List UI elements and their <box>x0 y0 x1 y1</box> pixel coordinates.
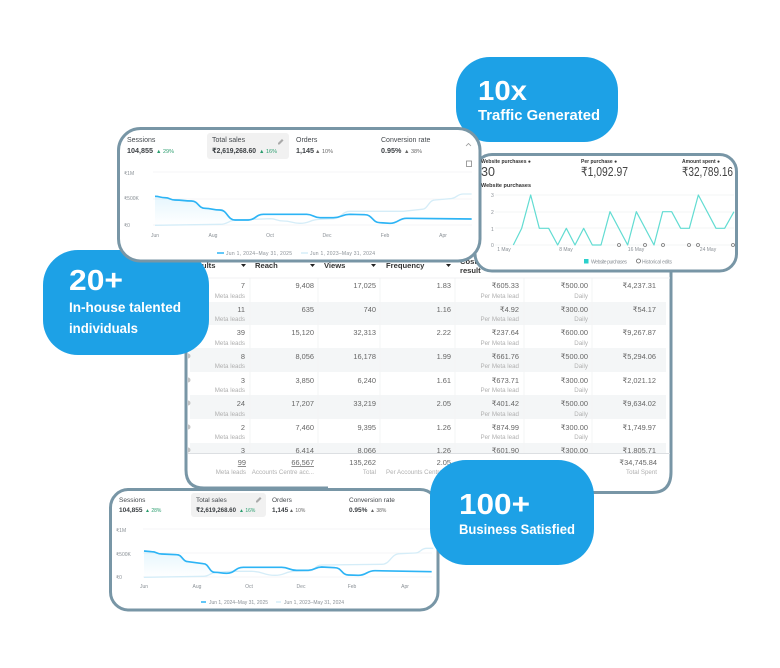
table rows: 32,313 <box>353 328 376 337</box>
table rows: ₹4,237.31 <box>623 281 656 290</box>
table rows: 2.22 <box>437 328 451 337</box>
chart legend: Jun 1, 2024–May 31, 2025 <box>226 251 292 257</box>
purchase metrics <box>481 159 733 189</box>
callout: 10x traffic generated: 10x <box>478 75 527 106</box>
callout: 100+ business satisfied <box>430 460 594 565</box>
line chart: website purchases: 8 May <box>559 247 573 253</box>
table rows: ₹300.00 <box>561 423 588 432</box>
line chart: sales: Jun <box>140 584 148 590</box>
table rows: 9,408 <box>296 281 314 290</box>
line chart: website purchases: 0 <box>491 243 494 249</box>
callout: 20+ in-house talented individuals: In-house talented <box>69 299 181 315</box>
table rows: Per Meta lead <box>480 340 520 347</box>
table column headers: Views <box>324 261 345 270</box>
table rows: Daily <box>574 340 589 347</box>
metric tabs: Orders <box>272 497 293 504</box>
table rows: ₹2,021.12 <box>623 376 656 385</box>
table rows: Per Meta lead <box>480 434 520 441</box>
line chart: website purchases: 24 May <box>700 247 717 253</box>
metric tabs: ▲ 29% <box>156 149 174 155</box>
table rows: 6,240 <box>358 376 376 385</box>
purchase metrics: Amount spent ● <box>682 159 720 165</box>
chart legend <box>201 600 344 606</box>
metric tabs: ₹2,619,268.60 <box>212 146 256 155</box>
metric tabs: Total sales <box>196 497 227 504</box>
table rows: Daily <box>574 316 589 323</box>
table rows: ₹500.00 <box>561 281 588 290</box>
chart legend <box>584 259 672 266</box>
table totals row: Per Accounts Centre <box>386 469 443 476</box>
table rows: 16,178 <box>353 352 376 361</box>
metric tabs: ▲ 38% <box>370 508 387 514</box>
table totals row <box>188 454 670 476</box>
table rows: 3 <box>241 446 245 455</box>
table rows: 635 <box>302 305 314 314</box>
table rows: Per Meta lead <box>480 411 520 418</box>
line chart: sales: Feb <box>381 233 390 239</box>
line chart: sales: ₹1M <box>124 171 134 177</box>
table rows: ₹600.00 <box>561 328 588 337</box>
purchase metrics: ₹1,092.97 <box>581 165 628 179</box>
table rows: 17,207 <box>291 399 314 408</box>
line chart: sales: Apr <box>401 584 409 590</box>
table column headers: Frequency <box>386 261 425 270</box>
line chart: sales: ₹500K <box>116 552 132 558</box>
metric tabs: Total sales <box>212 137 246 144</box>
table column headers: Results <box>188 261 215 270</box>
callout: 20+ in-house talented individuals <box>43 250 209 355</box>
table rows: ₹500.00 <box>561 399 588 408</box>
metric tabs: 0.95% <box>381 146 402 155</box>
table totals row: Total <box>363 469 376 476</box>
metric tabs: Conversion rate <box>381 137 431 144</box>
table rows: ₹9,267.87 <box>623 328 656 337</box>
table column headers: result <box>460 266 481 275</box>
table rows: 9,395 <box>358 423 376 432</box>
table rows: 15,120 <box>291 328 314 337</box>
line chart: sales: Aug <box>209 233 218 239</box>
table rows: ₹661.76 <box>492 352 519 361</box>
metric tabs: ▲ 16% <box>239 508 256 514</box>
table rows <box>186 278 670 455</box>
table totals row: Meta leads <box>216 469 246 476</box>
table rows: Per Meta lead <box>480 293 520 300</box>
table rows: 3,850 <box>296 376 314 385</box>
metric tabs: ▲ 28% <box>145 508 162 514</box>
chart legend: Jun 1, 2023–May 31, 2024 <box>310 251 375 257</box>
purchase metrics: 30 <box>481 165 495 179</box>
callout: 10x traffic generated: Traffic Generated <box>478 108 600 124</box>
line chart: sales <box>124 171 472 239</box>
table rows: Daily <box>574 293 589 300</box>
table rows: 8 <box>241 352 245 361</box>
table rows: ₹300.00 <box>561 376 588 385</box>
metric tabs: Sessions <box>119 497 146 504</box>
table totals row: Total Spent <box>626 469 657 476</box>
table rows: ₹300.00 <box>561 446 588 455</box>
metric tabs: 1,145 <box>272 507 289 514</box>
table rows: Daily <box>574 411 589 418</box>
table rows: ₹54.17 <box>633 305 656 314</box>
table rows: ₹4.92 <box>500 305 519 314</box>
chart legend <box>217 251 375 257</box>
table rows: 1.61 <box>437 376 451 385</box>
panel: total sales chart top <box>118 128 480 261</box>
line chart: sales: Oct <box>266 233 274 239</box>
table rows: 11 <box>237 305 245 314</box>
table rows: ₹673.71 <box>492 376 519 385</box>
metric tabs: ▲ 10% <box>289 508 306 514</box>
table rows: 2 <box>241 423 245 432</box>
table rows: 1.26 <box>437 446 451 455</box>
line chart: sales: Dec <box>297 584 306 590</box>
line chart: sales: ₹0 <box>116 575 122 581</box>
callout: 100+ business satisfied: Business Satisfied <box>459 521 575 537</box>
table rows: ₹874.99 <box>492 423 519 432</box>
table totals row: 135,262 <box>349 458 376 467</box>
table rows: Daily <box>574 363 589 370</box>
table rows: 740 <box>364 305 376 314</box>
table totals row: 66,567 <box>291 458 314 467</box>
table rows: 1.26 <box>437 423 451 432</box>
table totals row: 2.05 <box>437 458 451 467</box>
callout: 100+ business satisfied: 100+ <box>459 489 530 521</box>
table rows: Daily <box>574 434 589 441</box>
table rows: ₹1,805.71 <box>623 446 656 455</box>
line chart: sales: Apr <box>439 233 447 239</box>
table rows: 6,414 <box>296 446 314 455</box>
table rows: ₹605.33 <box>492 281 519 290</box>
metric tabs <box>119 493 395 517</box>
table rows: ₹401.42 <box>492 399 519 408</box>
line chart: website purchases: 16 May <box>628 247 645 253</box>
line chart: website purchases: 2 <box>491 210 494 216</box>
line chart: sales <box>116 528 433 590</box>
table rows: 8,066 <box>358 446 376 455</box>
metric tabs <box>127 133 472 166</box>
line chart: sales: ₹0 <box>124 223 130 229</box>
table rows: Meta leads <box>215 363 245 370</box>
purchase metrics: Website purchases ● <box>481 159 531 165</box>
table rows: Per Meta lead <box>480 363 520 370</box>
table rows: 1.99 <box>437 352 451 361</box>
callout: 20+ in-house talented individuals: 20+ <box>69 265 123 297</box>
table totals row: 99 <box>238 458 246 467</box>
table rows: ₹300.00 <box>561 305 588 314</box>
table rows: 17,025 <box>353 281 376 290</box>
line chart: website purchases: 3 <box>491 193 494 199</box>
purchase metrics: ₹32,789.16 <box>682 165 733 179</box>
metric tabs: ▲ 38% <box>404 149 422 155</box>
chart legend: Jun 1, 2023–May 31, 2024 <box>284 600 344 606</box>
line chart: sales: Feb <box>348 584 357 590</box>
table rows: 7,460 <box>296 423 314 432</box>
metric tabs: ▲ 16% <box>259 149 277 155</box>
line chart: sales: ₹500K <box>124 196 140 202</box>
line chart: website purchases: 1 <box>491 227 494 233</box>
panel: website purchases chart <box>475 154 736 271</box>
metric tabs: ▲ 10% <box>315 149 333 155</box>
line chart: website purchases <box>491 193 734 253</box>
metric tabs: 104,855 <box>127 146 153 155</box>
metric tabs: 0.95% <box>349 507 368 514</box>
table rows: Meta leads <box>215 316 245 323</box>
line chart: sales: Jun <box>151 233 159 239</box>
chart legend: Historical edits <box>642 260 672 266</box>
table rows: Per Meta lead <box>480 387 520 394</box>
line chart: sales: ₹1M <box>116 528 126 534</box>
table rows: 39 <box>237 328 245 337</box>
table rows: Daily <box>574 387 589 394</box>
metric tabs: Orders <box>296 137 318 144</box>
table rows: ₹601.90 <box>492 446 519 455</box>
table rows: Meta leads <box>215 293 245 300</box>
table rows: 1.83 <box>437 281 451 290</box>
table rows: 1.16 <box>437 305 451 314</box>
table rows: ₹9,634.02 <box>623 399 656 408</box>
table rows: 24 <box>237 399 245 408</box>
line chart: sales: Dec <box>323 233 332 239</box>
metric tabs: Sessions <box>127 137 156 144</box>
table rows: ₹1,749.97 <box>623 423 656 432</box>
table rows: 33,219 <box>353 399 376 408</box>
table rows: ₹500.00 <box>561 352 588 361</box>
callout: 20+ in-house talented individuals: individuals <box>69 320 138 336</box>
line chart: sales: Oct <box>245 584 253 590</box>
callout: 10x traffic generated <box>456 57 618 142</box>
metric tabs: Conversion rate <box>349 497 395 504</box>
table rows: Meta leads <box>215 411 245 418</box>
table column headers: Cost per <box>460 257 491 266</box>
metric tabs: 104,855 <box>119 507 143 514</box>
table rows: 2.05 <box>437 399 451 408</box>
table totals row: Accounts Centre acc... <box>252 469 314 476</box>
panel: data table <box>186 250 671 492</box>
chart legend: Website purchases <box>591 260 628 266</box>
purchase metrics: Website purchases <box>481 183 531 189</box>
chart legend: Jun 1, 2024–May 31, 2025 <box>209 600 268 606</box>
metric tabs: 1,145 <box>296 146 314 155</box>
table rows: Per Meta lead <box>480 316 520 323</box>
table rows: 3 <box>241 376 245 385</box>
metric tabs: ₹2,619,268.60 <box>196 507 236 514</box>
table rows: ₹237.64 <box>492 328 519 337</box>
line chart: sales: Aug <box>193 584 202 590</box>
panel: total sales chart bottom <box>110 490 438 610</box>
table rows: Meta leads <box>215 387 245 394</box>
table rows: Meta leads <box>215 340 245 347</box>
purchase metrics: Per purchase ● <box>581 159 617 165</box>
table rows: ₹5,294.06 <box>623 352 656 361</box>
table totals row: ₹34,745.84 <box>619 458 657 467</box>
table rows: 8,056 <box>296 352 314 361</box>
table column headers <box>188 257 491 275</box>
line chart: website purchases: 1 May <box>497 247 511 253</box>
table column headers: Reach <box>255 261 278 270</box>
table rows: 7 <box>241 281 245 290</box>
table rows: Meta leads <box>215 434 245 441</box>
